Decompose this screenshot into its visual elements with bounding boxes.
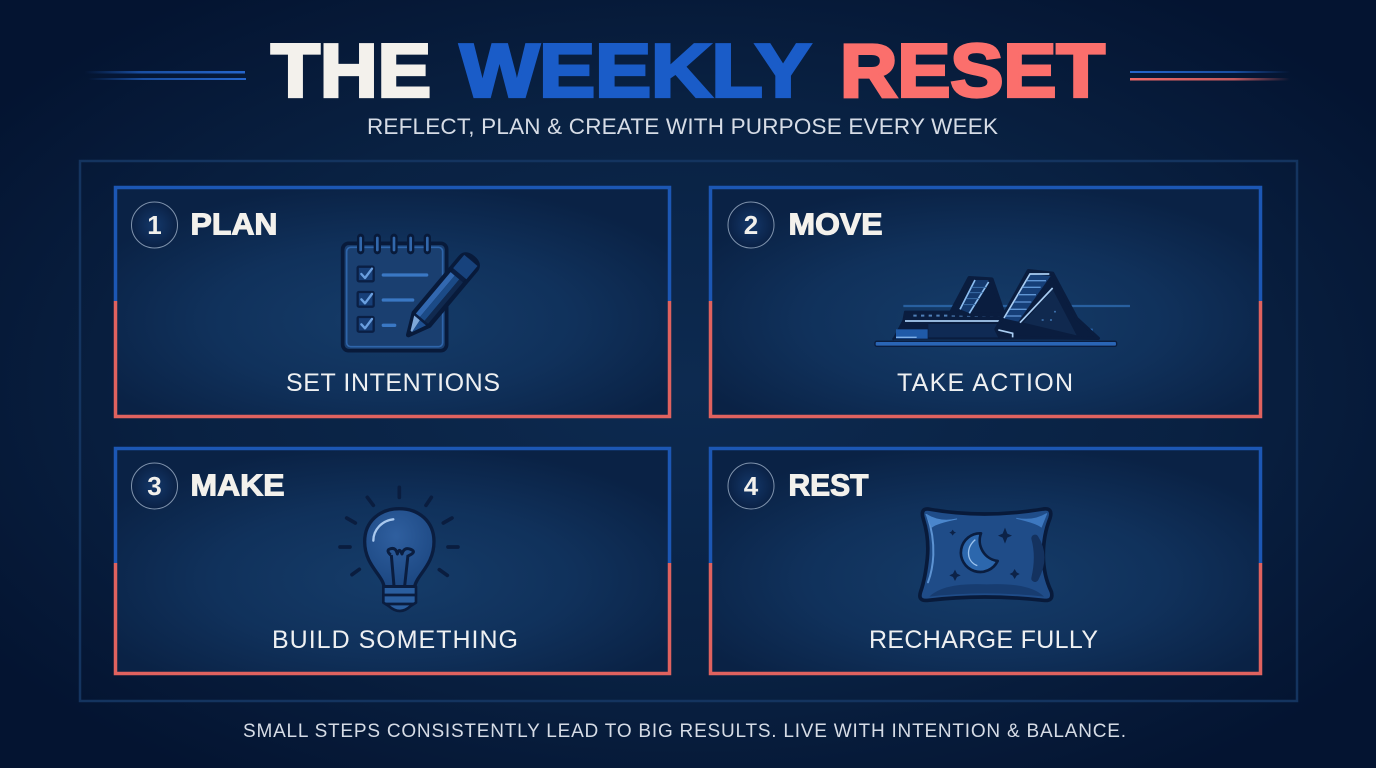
caption: build something: BUILD SOMETHING	[272, 626, 518, 654]
icon: notepad and pen	[343, 237, 481, 351]
icon: light bulb	[340, 487, 458, 611]
subtitle: REFLECT, PLAN & CREATE WITH PURPOSE EVERY WEEK	[367, 114, 998, 139]
number badge 4	[728, 463, 774, 509]
panel: rest	[710, 448, 1260, 674]
title	[271, 28, 1105, 112]
number badge 2: 2	[744, 210, 758, 240]
heading: make: MAKE	[190, 468, 284, 502]
number badge 1	[132, 202, 178, 248]
number badge 3	[132, 463, 178, 509]
title: RESET	[840, 28, 1105, 112]
icon: starting blocks	[875, 271, 1130, 346]
number badge 1: 1	[147, 210, 162, 240]
heading: rest: REST	[788, 468, 869, 502]
caption: recharge fully: RECHARGE FULLY	[869, 626, 1098, 654]
panel: make	[116, 448, 670, 674]
caption: take action: TAKE ACTION	[897, 369, 1073, 397]
title: WEEKLY	[460, 28, 811, 112]
title accent lines right	[1130, 71, 1290, 80]
icon: pillow with moon	[920, 509, 1052, 600]
footer tagline: SMALL STEPS CONSISTENTLY LEAD TO BIG RESULTS. LIVE WITH INTENTION & BALANCE.	[243, 721, 1126, 742]
number badge 4: 4	[744, 471, 759, 501]
heading: move: MOVE	[788, 206, 882, 242]
panel: move	[710, 188, 1260, 416]
title accent lines left	[85, 71, 246, 80]
title: THE	[271, 28, 431, 112]
panel: plan	[116, 188, 670, 416]
caption: set intentions: SET INTENTIONS	[286, 369, 500, 397]
outer frame	[80, 161, 1297, 701]
number badge 3: 3	[147, 471, 162, 501]
number badge 2	[728, 202, 774, 248]
heading: plan: PLAN	[190, 206, 278, 242]
